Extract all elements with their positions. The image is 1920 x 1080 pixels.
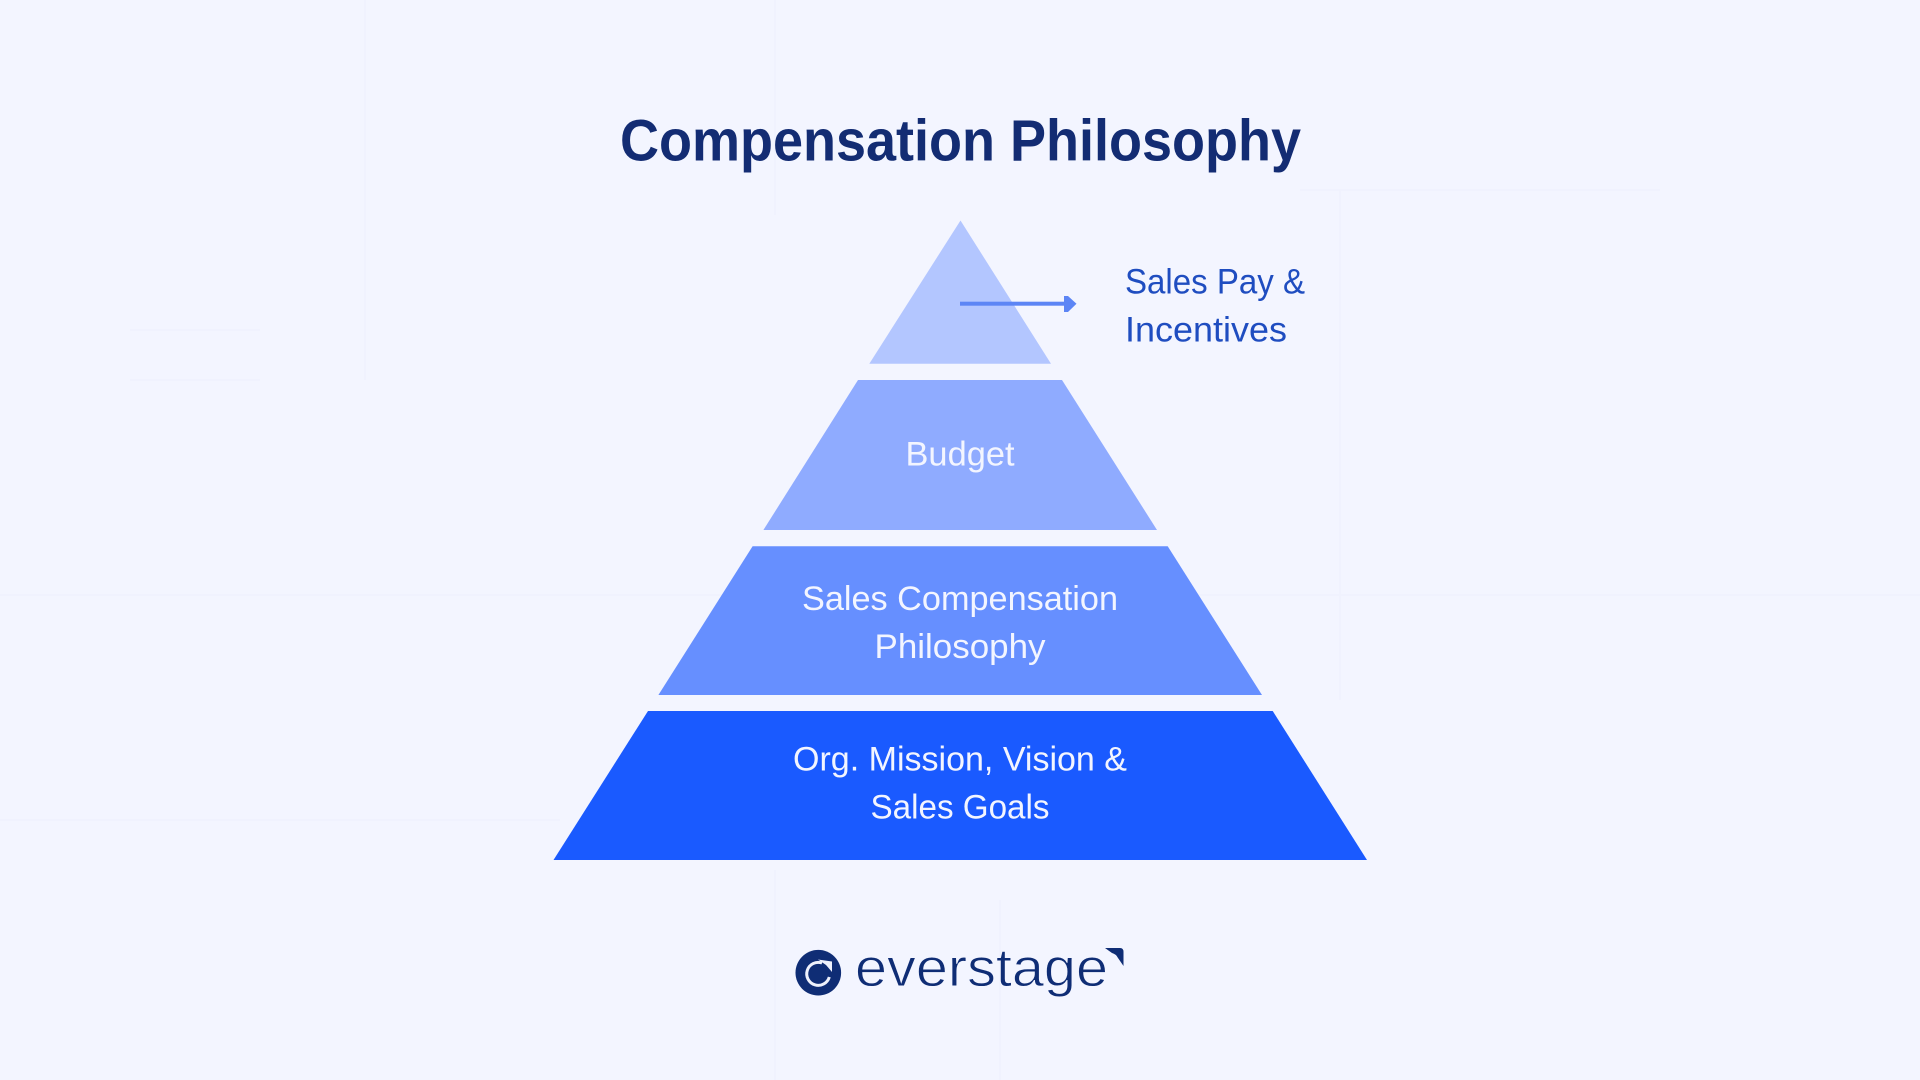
icon: logo corner mark	[1105, 948, 1124, 966]
title: Compensation Philosophy	[620, 109, 1301, 174]
label: Sales Pay & Incentives: Sales Pay &	[1125, 262, 1305, 301]
logo: everstage	[796, 938, 1124, 998]
logo wordmark: everstage	[855, 938, 1108, 998]
pyramid tier: Org. Mission, Vision & Sales Goals	[554, 711, 1367, 860]
pyramid tier: Budget	[763, 380, 1157, 530]
icon: logo mark	[796, 950, 841, 996]
label: Sales Pay & Incentives: Incentives	[1125, 310, 1287, 349]
pyramid	[554, 220, 1367, 860]
arrow: top tier to label	[960, 296, 1076, 312]
pyramid tier: Budget: Budget	[906, 436, 1015, 474]
pyramid tier: Sales Pay & Incentives	[869, 220, 1051, 364]
pyramid tier: Org. Mission, Vision & Sales Goals: Org. Mission, Vision &	[793, 741, 1127, 779]
pyramid tier: Sales Compensation Philosophy	[658, 546, 1262, 695]
label: Sales Pay & Incentives	[1125, 262, 1305, 349]
pyramid tier: Org. Mission, Vision & Sales Goals: Sales Goals	[870, 789, 1050, 827]
pyramid tier: Sales Compensation Philosophy: Philosophy	[874, 628, 1046, 666]
pyramid tier: Sales Compensation Philosophy: Sales Compensation	[802, 580, 1118, 618]
